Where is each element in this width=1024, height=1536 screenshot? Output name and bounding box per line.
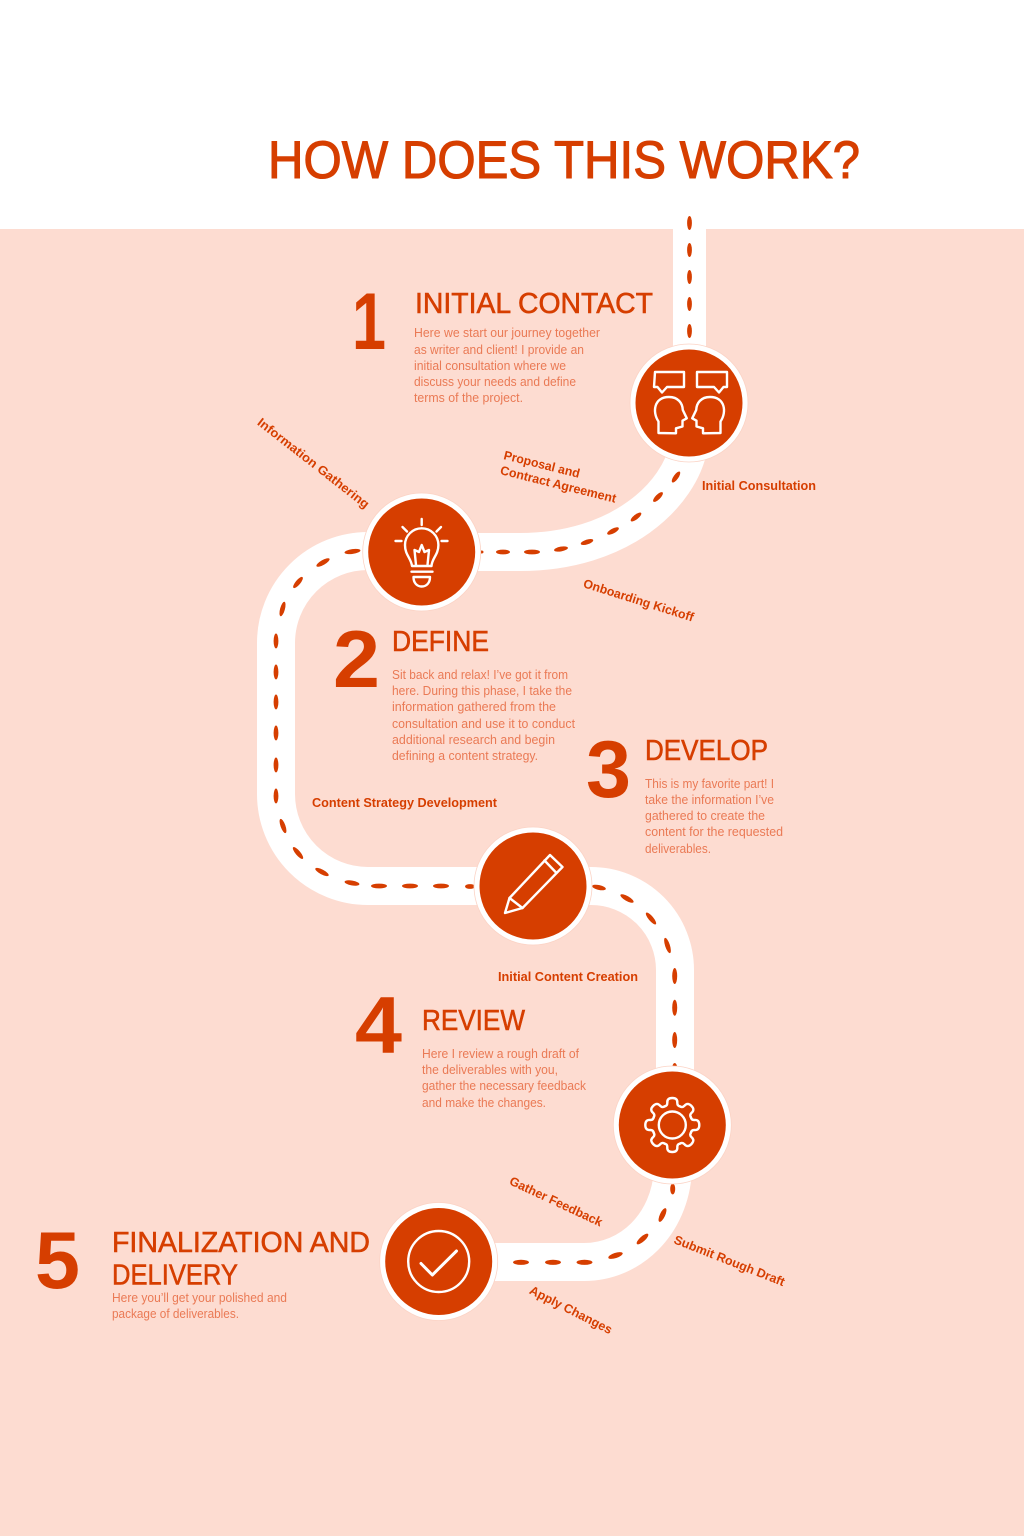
step 2 text block: 2 [333,615,380,705]
road label: Information Gathering: Information Gathering [255,415,372,511]
road label: Gather Feedback: Gather Feedback [507,1174,605,1229]
step 2 text block [333,615,576,763]
step 5 text block: FINALIZATION AND [112,1227,370,1259]
step 2 text block: defining a content strategy. [392,749,538,763]
road label: Initial Content Creation: Initial Content Creation [498,970,638,984]
step 5 text block [35,1216,370,1321]
step 5 text block: package of deliverables. [112,1307,239,1321]
step 4 milestone icon: gear [613,1066,731,1184]
road centre dashes [274,216,692,1265]
step 3 text block: gathered to create the [645,809,765,823]
step 1 text block: as writer and client! I provide an [414,343,584,357]
step 3 text block [586,725,783,856]
step 4 text block: and make the changes. [422,1096,546,1110]
step 2 text block: additional research and begin [392,733,555,747]
road label: Apply Changes: Apply Changes [527,1283,615,1337]
step 4 text block: REVIEW [422,1005,525,1037]
step 2 text block: information gathered from the [392,700,556,714]
step 4 text block: 4 [355,981,402,1071]
step 4 text block: the deliverables with you, [422,1063,558,1077]
step 5 text block: Here you’ll get your polished and [112,1291,287,1305]
step 3 text block: content for the requested [645,825,783,839]
step 2 milestone icon: light bulb [363,493,481,611]
step 4 text block: Here I review a rough draft of [422,1047,580,1061]
step 2 text block: here. During this phase, I take the [392,684,572,698]
step 4 text block [355,981,587,1110]
step 1 text block: terms of the project. [414,391,523,405]
step 2 text block: Sit back and relax! I’ve got it from [392,668,568,682]
road label: Initial Consultation: Initial Consultation [702,479,816,493]
road label: Content Strategy Development: Content Strategy Development [312,796,498,810]
step 5 text block: DELIVERY [112,1260,238,1292]
step 1 text block: INITIAL CONTACT [415,288,653,320]
step 1 text block: Here we start our journey together [414,326,600,340]
step 3 text block: DEVELOP [645,735,768,767]
step 5 milestone icon: check mark [380,1202,498,1320]
road label: Proposal and Contract Agreement: Proposal and [502,448,581,481]
step 4 text block: gather the necessary feedback [422,1079,587,1093]
title: HOW DOES THIS WORK? [268,131,860,190]
step 5 text block: 5 [35,1216,80,1306]
road label: Proposal and Contract Agreement: Contract Agreement [499,463,618,506]
step 2 text block: consultation and use it to conduct [392,717,576,731]
step 3 milestone icon: pencil [474,827,592,945]
step 1 text block: initial consultation where we [414,359,566,373]
step 3 text block: take the information I’ve [645,793,774,807]
road label: Onboarding Kickoff: Onboarding Kickoff [582,577,696,625]
step 3 text block: deliverables. [645,842,711,856]
step 2 text block: DEFINE [392,626,489,658]
step 3 text block: 3 [586,725,631,815]
step 1 text block: discuss your needs and define [414,375,576,389]
step 1 milestone icon: two heads talking [630,344,748,462]
step 1 text block: 1 [352,277,386,367]
step 1 text block [352,277,653,405]
road label: Submit Rough Draft: Submit Rough Draft [672,1233,788,1289]
winding road [276,229,690,1262]
step 3 text block: This is my favorite part! I [645,777,774,791]
